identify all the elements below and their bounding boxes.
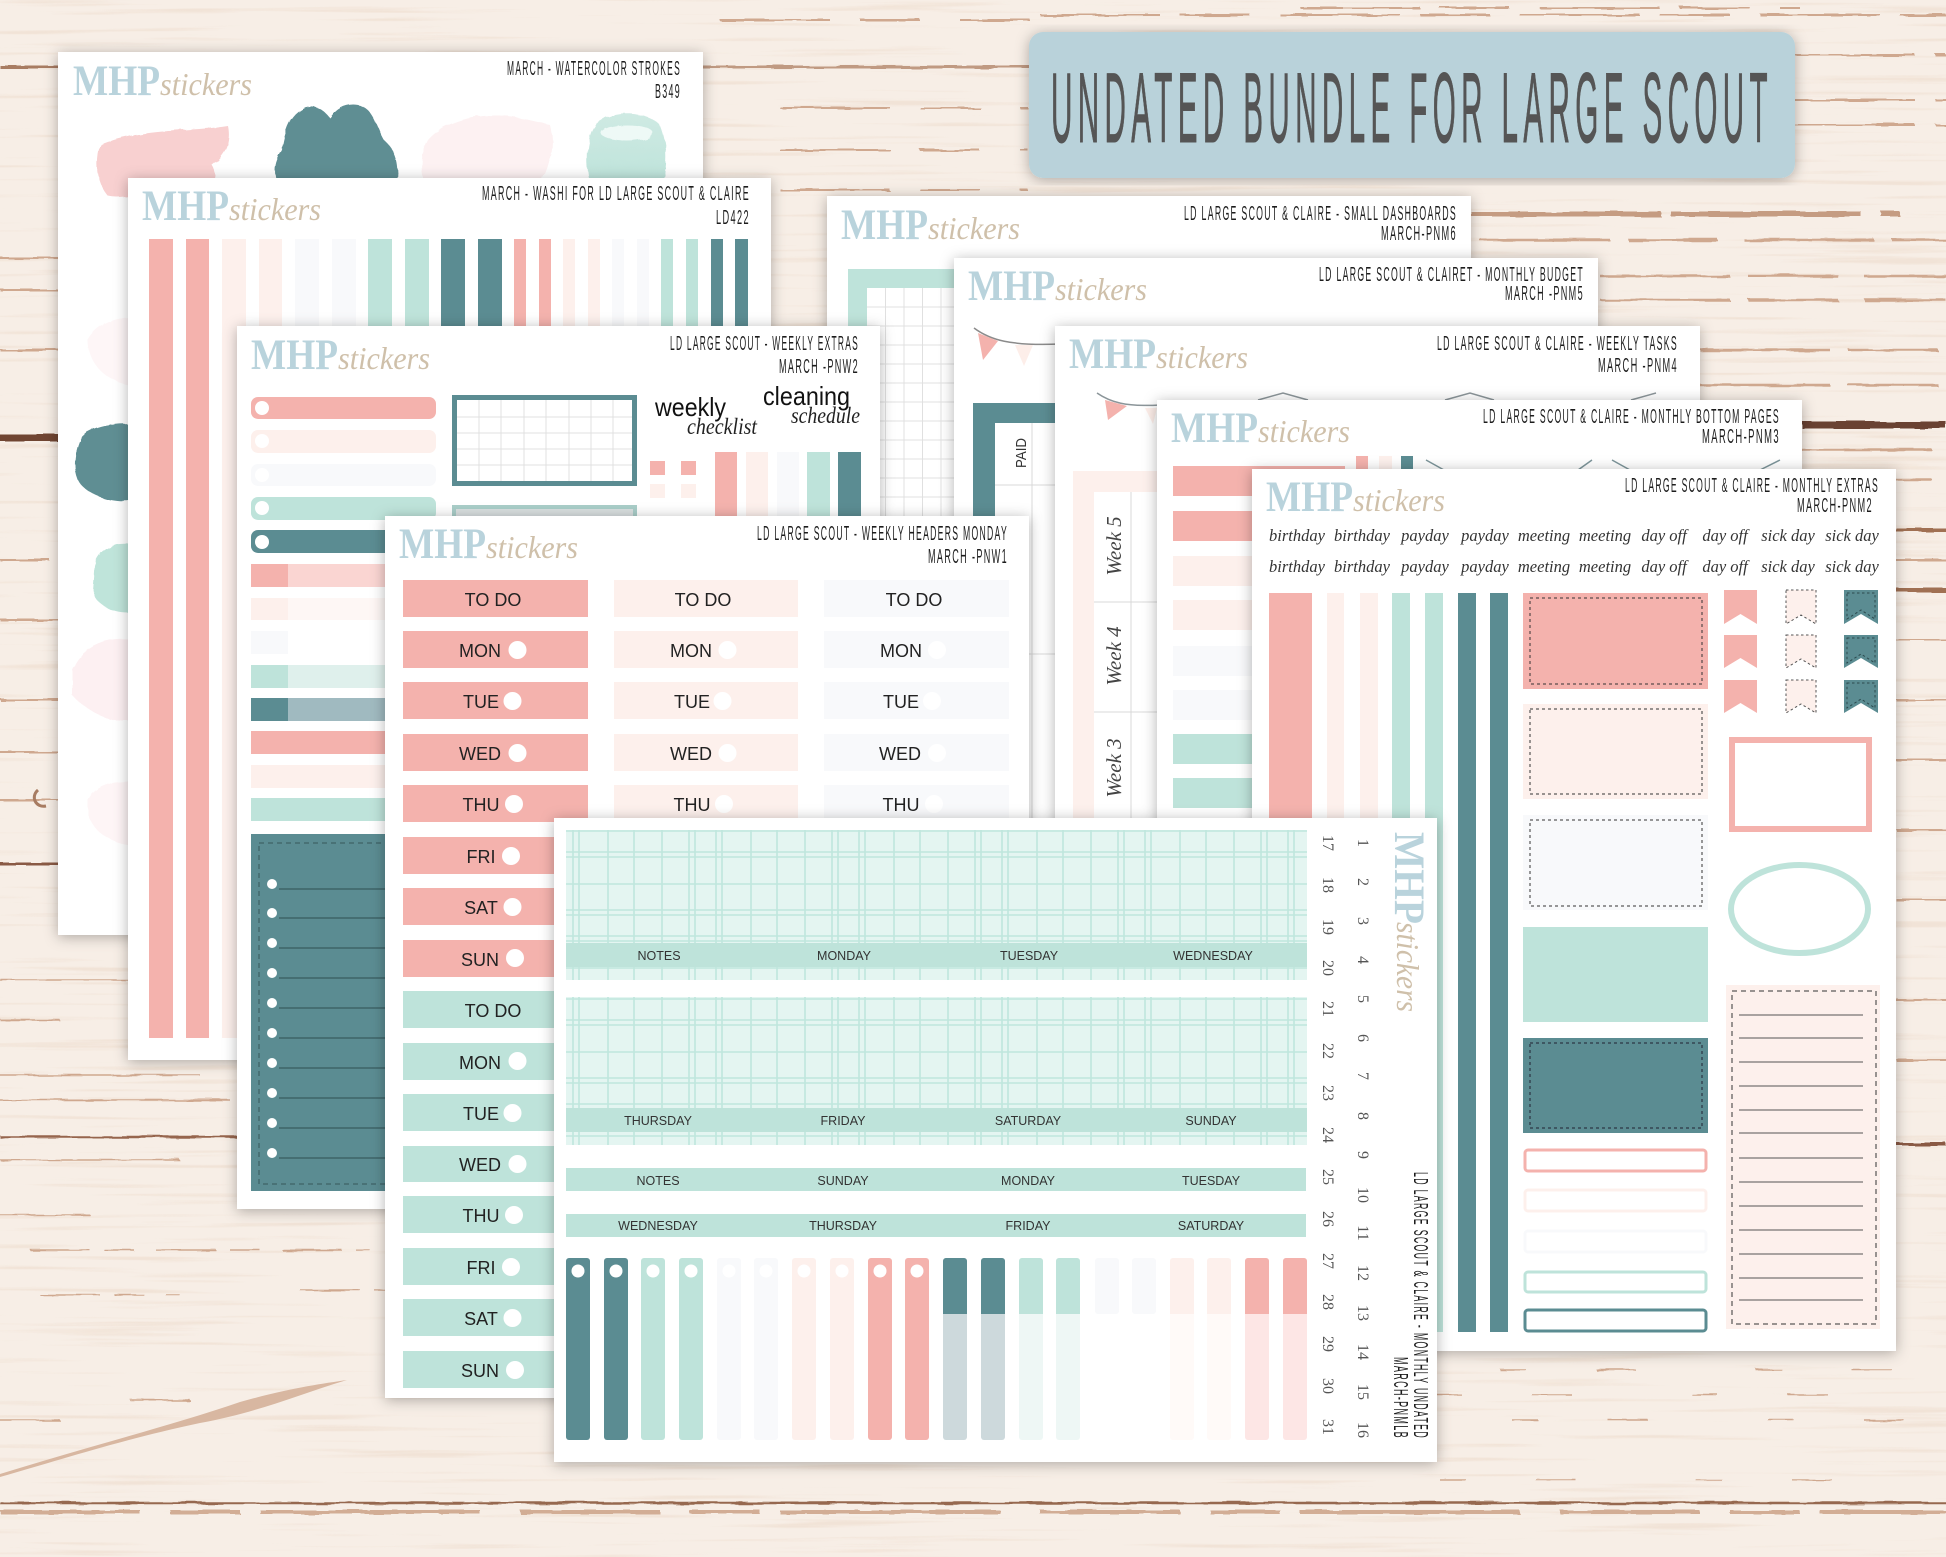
pink day column: WED xyxy=(459,744,501,764)
script word stickers: sick day xyxy=(1761,526,1815,545)
plaid panel bottom: SATURDAY xyxy=(995,1114,1062,1128)
date numbers 17-31: 18 xyxy=(1319,877,1336,893)
date numbers 17-31: 30 xyxy=(1319,1378,1336,1394)
sheet title xyxy=(482,183,750,229)
two-tone bars xyxy=(251,564,391,821)
header band one: SUNDAY xyxy=(817,1174,869,1188)
logo: MHP xyxy=(251,332,338,379)
header band two: WEDNESDAY xyxy=(618,1219,698,1233)
script word stickers: payday xyxy=(1400,526,1449,545)
vertical logo: stickers xyxy=(1390,922,1426,1012)
sticker sheet: weekly extras xyxy=(237,326,880,1209)
vertical logo xyxy=(1385,832,1432,1012)
second grid box xyxy=(454,507,635,537)
script word stickers: day off xyxy=(1641,557,1689,576)
sheet title xyxy=(1319,264,1584,305)
script word stickers: payday xyxy=(1460,526,1509,545)
sticker sheet: weekly tasks: MARCH -PNM4 xyxy=(1598,355,1678,377)
pale blue day column xyxy=(824,580,1009,822)
plaid panel bottom: FRIDAY xyxy=(821,1114,866,1128)
logo: MHP xyxy=(73,58,160,105)
pale blue day column: WED xyxy=(879,744,921,764)
logo xyxy=(399,521,578,568)
rounded tab bars xyxy=(251,397,436,553)
full-height tab stickers xyxy=(566,1258,929,1440)
week labels: Week 4 xyxy=(1102,626,1126,686)
watercolor blobs xyxy=(72,104,666,845)
date numbers 1-16: 13 xyxy=(1354,1305,1371,1321)
script word stickers: birthday xyxy=(1334,526,1391,545)
logo: stickers xyxy=(486,529,578,565)
sticker sheet: monthly budget: MARCH -PNM5 xyxy=(1505,283,1584,305)
mint day column: WED xyxy=(459,1155,501,1175)
sheet title xyxy=(507,58,681,103)
date numbers 1-16: 16 xyxy=(1354,1422,1371,1438)
date numbers 1-16 xyxy=(1354,839,1371,1438)
sheet title xyxy=(757,523,1008,568)
logo: MHP xyxy=(968,263,1055,310)
pale blue day column: MON xyxy=(880,641,922,661)
date numbers 17-31: 17 xyxy=(1319,835,1336,851)
logo: MHP xyxy=(1069,331,1156,378)
dashed boxes xyxy=(1523,593,1708,1133)
date numbers 1-16: 12 xyxy=(1354,1265,1371,1281)
light pink day column: TO DO xyxy=(675,590,731,610)
date numbers 17-31: 26 xyxy=(1319,1211,1336,1227)
logo: stickers xyxy=(1055,271,1147,307)
script word stickers: meeting xyxy=(1579,526,1631,545)
sticker sheet: monthly bottom pages xyxy=(1157,400,1802,1020)
date numbers 1-16: 11 xyxy=(1354,1225,1371,1241)
header band one: NOTES xyxy=(636,1174,680,1188)
logo xyxy=(968,263,1147,310)
script word stickers: day off xyxy=(1702,557,1750,576)
sticker sheet: watercolor strokes xyxy=(58,52,703,935)
plaid panel top: WEDNESDAY xyxy=(1173,949,1253,963)
plaid panel bottom xyxy=(566,997,1307,1145)
date numbers 1-16: 6 xyxy=(1354,1034,1371,1042)
mint day column: SUN xyxy=(461,1361,499,1381)
script word stickers: meeting xyxy=(1579,557,1631,576)
plaid panel bottom: SUNDAY xyxy=(1185,1114,1237,1128)
logo: stickers xyxy=(1353,482,1445,518)
light pink day column: TUE xyxy=(674,692,710,712)
date numbers 1-16: 15 xyxy=(1354,1384,1371,1400)
logo xyxy=(251,332,430,379)
mint grid dashboard xyxy=(848,269,1148,669)
sticker sheet: small dashboards: MARCH-PNM6 xyxy=(1381,223,1457,245)
pink day column: SAT xyxy=(464,898,498,918)
lined notes box xyxy=(1726,985,1880,1329)
week labels: Week 5 xyxy=(1102,516,1126,576)
plaid panel top: NOTES xyxy=(637,949,681,963)
PAID label: PAID xyxy=(1013,438,1030,468)
mint day column xyxy=(403,991,588,1388)
sticker sheet: washi strips: LD422 xyxy=(716,207,750,229)
sheet title xyxy=(1437,333,1678,377)
logo xyxy=(841,202,1020,249)
script word stickers: payday xyxy=(1400,557,1449,576)
washi stripes xyxy=(149,239,748,1038)
sticker sheet: monthly bottom pages: MARCH-PNM3 xyxy=(1702,426,1780,448)
small squares and bars xyxy=(650,452,861,522)
sheet title xyxy=(1483,406,1780,448)
date numbers 1-16: 3 xyxy=(1354,917,1371,925)
cleaning schedule script: schedule xyxy=(791,403,860,428)
pink day column xyxy=(403,580,588,977)
sticker sheet: weekly headers xyxy=(385,516,1029,1398)
script word stickers: sick day xyxy=(1761,557,1815,576)
logo: MHP xyxy=(841,202,928,249)
bunting xyxy=(1097,393,1656,424)
weekly checklist script xyxy=(654,392,758,439)
date numbers 17-31: 28 xyxy=(1319,1294,1336,1310)
script word stickers: meeting xyxy=(1518,526,1570,545)
sheet title xyxy=(1184,203,1457,245)
pale blue day column: TUE xyxy=(883,692,919,712)
sticker sheet: weekly tasks xyxy=(1055,326,1700,1016)
logo: stickers xyxy=(338,340,430,376)
sticker sheet: watercolor strokes: B349 xyxy=(655,81,681,103)
budget table frame xyxy=(973,403,1173,823)
sticker sheet: monthly undated xyxy=(554,818,1437,1462)
logo xyxy=(1069,331,1248,378)
plaid panel top xyxy=(566,830,1307,980)
date numbers 17-31: 27 xyxy=(1319,1253,1336,1269)
sticker sheet: monthly budget xyxy=(954,258,1598,1018)
plaid panel top: MONDAY xyxy=(817,949,872,963)
vertical logo: MHP xyxy=(1385,832,1432,924)
header band two: SATURDAY xyxy=(1178,1219,1245,1233)
pink day column: MON xyxy=(459,641,501,661)
two-tone tab stickers xyxy=(943,1258,1307,1440)
pink day column: TO DO xyxy=(465,590,521,610)
plaid panel top: TUESDAY xyxy=(1000,949,1059,963)
logo: stickers xyxy=(160,66,252,102)
date numbers 17-31: 22 xyxy=(1319,1043,1336,1059)
pink frame xyxy=(1732,740,1869,829)
date numbers 1-16: 2 xyxy=(1354,878,1371,886)
date numbers 1-16: 5 xyxy=(1354,995,1371,1003)
week labels xyxy=(1102,516,1126,798)
light pink day column: MON xyxy=(670,641,712,661)
sticker sheet: small dashboards xyxy=(827,196,1471,1016)
pale blue day column: THU xyxy=(882,795,920,815)
title banner xyxy=(1029,32,1795,178)
script word stickers: sick day xyxy=(1825,526,1879,545)
mint day column: FRI xyxy=(466,1258,496,1278)
date numbers 17-31: 23 xyxy=(1319,1085,1336,1101)
grid box xyxy=(454,398,634,484)
script word stickers: payday xyxy=(1460,557,1509,576)
date numbers 1-16: 1 xyxy=(1354,839,1371,847)
mint day column: SAT xyxy=(464,1309,498,1329)
sheet title xyxy=(1625,475,1879,517)
script word stickers xyxy=(1269,526,1879,576)
sticker sheet: monthly undated: MARCH-PNMLB xyxy=(1389,1357,1411,1439)
date numbers 17-31: 24 xyxy=(1319,1127,1336,1143)
logo xyxy=(73,58,252,105)
date numbers 17-31: 20 xyxy=(1319,960,1336,976)
pink day column: SUN xyxy=(461,950,499,970)
weekly checklist script: checklist xyxy=(687,414,758,439)
script word stickers: birthday xyxy=(1334,557,1391,576)
script word stickers: day off xyxy=(1702,526,1750,545)
light pink day column xyxy=(614,580,798,822)
date numbers 17-31: 19 xyxy=(1319,919,1336,935)
pink day column: THU xyxy=(462,795,500,815)
outlined label boxes xyxy=(1525,1150,1706,1331)
script word stickers: sick day xyxy=(1825,557,1879,576)
script word stickers: day off xyxy=(1641,526,1689,545)
weeks table xyxy=(1073,471,1274,822)
logo: stickers xyxy=(928,210,1020,246)
logo: stickers xyxy=(229,191,321,227)
sticker sheet: weekly headers: MARCH -PNW1 xyxy=(928,546,1008,568)
header band two: THURSDAY xyxy=(809,1219,878,1233)
pink day column: TUE xyxy=(463,692,499,712)
text: LD LARGE SCOUT & CLAIRET - MONTHLY BUDGET xyxy=(1319,264,1584,286)
teal checklist panel xyxy=(251,834,399,1191)
text: MARCH - WATERCOLOR STROKES xyxy=(507,58,681,80)
sheet title xyxy=(670,333,859,378)
light pink day column: THU xyxy=(674,795,710,815)
mint day column: TUE xyxy=(463,1104,499,1124)
date numbers 1-16: 9 xyxy=(1354,1151,1371,1159)
date numbers 17-31: 31 xyxy=(1319,1419,1336,1435)
logo: MHP xyxy=(142,183,229,230)
flag stickers xyxy=(1724,590,1878,713)
mint day column: MON xyxy=(459,1053,501,1073)
text: LD LARGE SCOUT - WEEKLY EXTRAS xyxy=(670,333,859,355)
script word stickers: meeting xyxy=(1518,557,1570,576)
date numbers 1-16: 8 xyxy=(1354,1112,1371,1120)
date numbers 1-16: 10 xyxy=(1354,1187,1371,1203)
date numbers 17-31: 25 xyxy=(1319,1169,1336,1185)
date numbers 17-31: 21 xyxy=(1319,1001,1336,1017)
date numbers 17-31: 29 xyxy=(1319,1336,1336,1352)
sticker sheet: weekly extras: MARCH -PNW2 xyxy=(779,356,859,378)
script word stickers: birthday xyxy=(1269,557,1326,576)
mint oval xyxy=(1731,865,1868,953)
header band one: TUESDAY xyxy=(1182,1174,1241,1188)
light pink day column: WED xyxy=(670,744,712,764)
logo: MHP xyxy=(1266,474,1353,521)
header band two xyxy=(566,1214,1306,1237)
bunting xyxy=(974,328,1060,366)
logo xyxy=(1171,405,1350,452)
logo: stickers xyxy=(1258,413,1350,449)
date numbers 17-31 xyxy=(1319,835,1336,1435)
logo xyxy=(142,183,321,230)
header band two: FRIDAY xyxy=(1006,1219,1051,1233)
logo xyxy=(1266,474,1445,521)
script word stickers: birthday xyxy=(1269,526,1326,545)
text: MARCH - WASHI FOR LD LARGE SCOUT & CLAIRE xyxy=(482,183,750,205)
sticker sheet: washi strips xyxy=(128,178,771,1060)
logo: stickers xyxy=(1156,339,1248,375)
mint day column: TO DO xyxy=(465,1001,521,1021)
washi stripes xyxy=(1269,593,1508,1332)
logo: MHP xyxy=(1171,405,1258,452)
header band one xyxy=(566,1168,1306,1191)
text: LD LARGE SCOUT - WEEKLY HEADERS MONDAY xyxy=(757,523,1008,545)
cleaning schedule script xyxy=(763,381,860,428)
date numbers 1-16: 14 xyxy=(1354,1344,1371,1360)
pink day column: FRI xyxy=(466,847,496,867)
pale blue day column: TO DO xyxy=(886,590,942,610)
date numbers 1-16: 4 xyxy=(1354,956,1371,964)
weekly checklist script: weekly xyxy=(654,392,726,422)
date numbers 1-16: 7 xyxy=(1354,1072,1371,1080)
logo: MHP xyxy=(399,521,486,568)
sticker sheet: monthly extras xyxy=(1252,469,1896,1351)
cleaning schedule script: cleaning xyxy=(763,381,850,411)
stacked bars xyxy=(1173,456,1780,808)
header band one: MONDAY xyxy=(1001,1174,1056,1188)
text: LD LARGE SCOUT & CLAIRE - SMALL DASHBOARDS xyxy=(1184,203,1457,225)
week labels: Week 3 xyxy=(1102,738,1126,798)
mint day column: THU xyxy=(462,1206,500,1226)
plaid panel bottom: THURSDAY xyxy=(624,1114,693,1128)
vertical sheet title xyxy=(1389,1172,1431,1439)
